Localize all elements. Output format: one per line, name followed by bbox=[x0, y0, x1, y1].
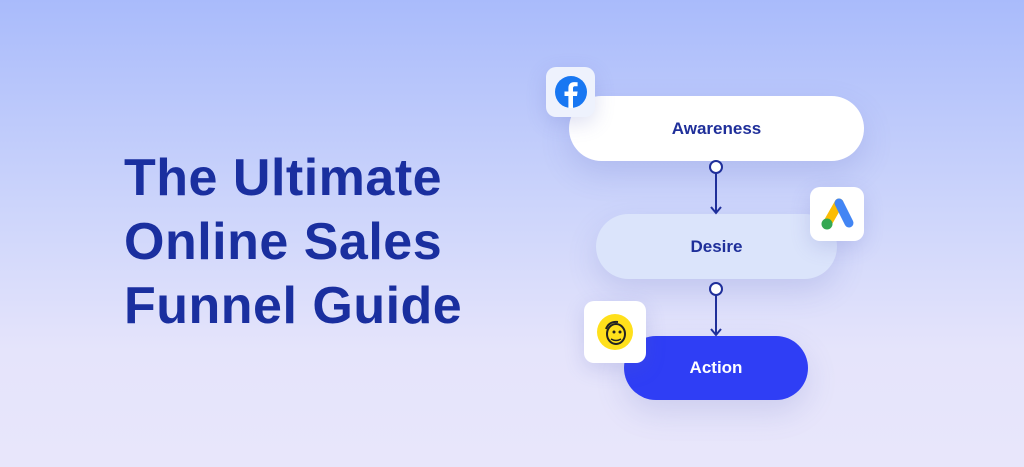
icon: facebook bbox=[546, 67, 595, 117]
title: The Ultimate bbox=[124, 149, 442, 207]
icon: mailchimp bbox=[584, 301, 646, 363]
title: Online Sales bbox=[124, 213, 442, 271]
pill: action: Action bbox=[690, 358, 742, 377]
pill: awareness: Awareness bbox=[672, 118, 761, 138]
pill: desire: Desire bbox=[690, 236, 742, 256]
pill: awareness bbox=[569, 96, 864, 161]
icon: google ads bbox=[810, 187, 864, 241]
title bbox=[124, 149, 462, 335]
arrow: desire to action bbox=[710, 283, 722, 335]
pill: action bbox=[624, 336, 808, 400]
pill: desire bbox=[596, 214, 837, 279]
title: Funnel Guide bbox=[124, 277, 462, 335]
arrow: awareness to desire bbox=[710, 161, 722, 213]
